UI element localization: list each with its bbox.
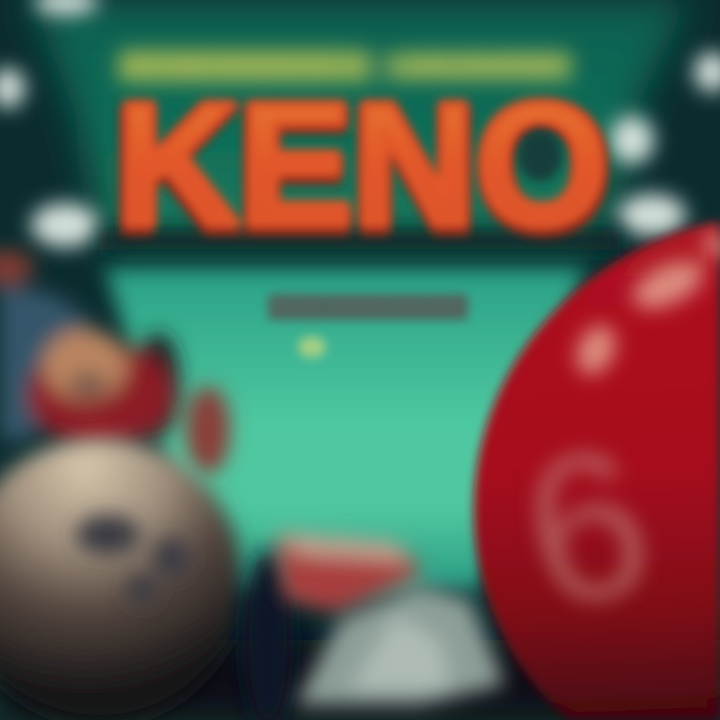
left cream ball (0, 438, 242, 720)
number on red ball: 6 (502, 399, 672, 655)
decorative white dots (0, 0, 720, 247)
subtitle bar (268, 294, 468, 320)
dark gap next to cream ball (242, 550, 294, 720)
title: upper tagline: KENO GAME (120, 49, 570, 85)
title: KENO: KENO (116, 66, 608, 261)
bottom centre ticket (275, 532, 505, 705)
subtitle bar: PLAY KENO ONLINE (273, 297, 463, 317)
red ball (474, 222, 720, 720)
small yellow mark (298, 336, 326, 358)
game table (105, 268, 585, 590)
title: upper tagline (118, 49, 572, 85)
title: KENO: KENO (113, 71, 611, 270)
left background figure (0, 250, 230, 474)
